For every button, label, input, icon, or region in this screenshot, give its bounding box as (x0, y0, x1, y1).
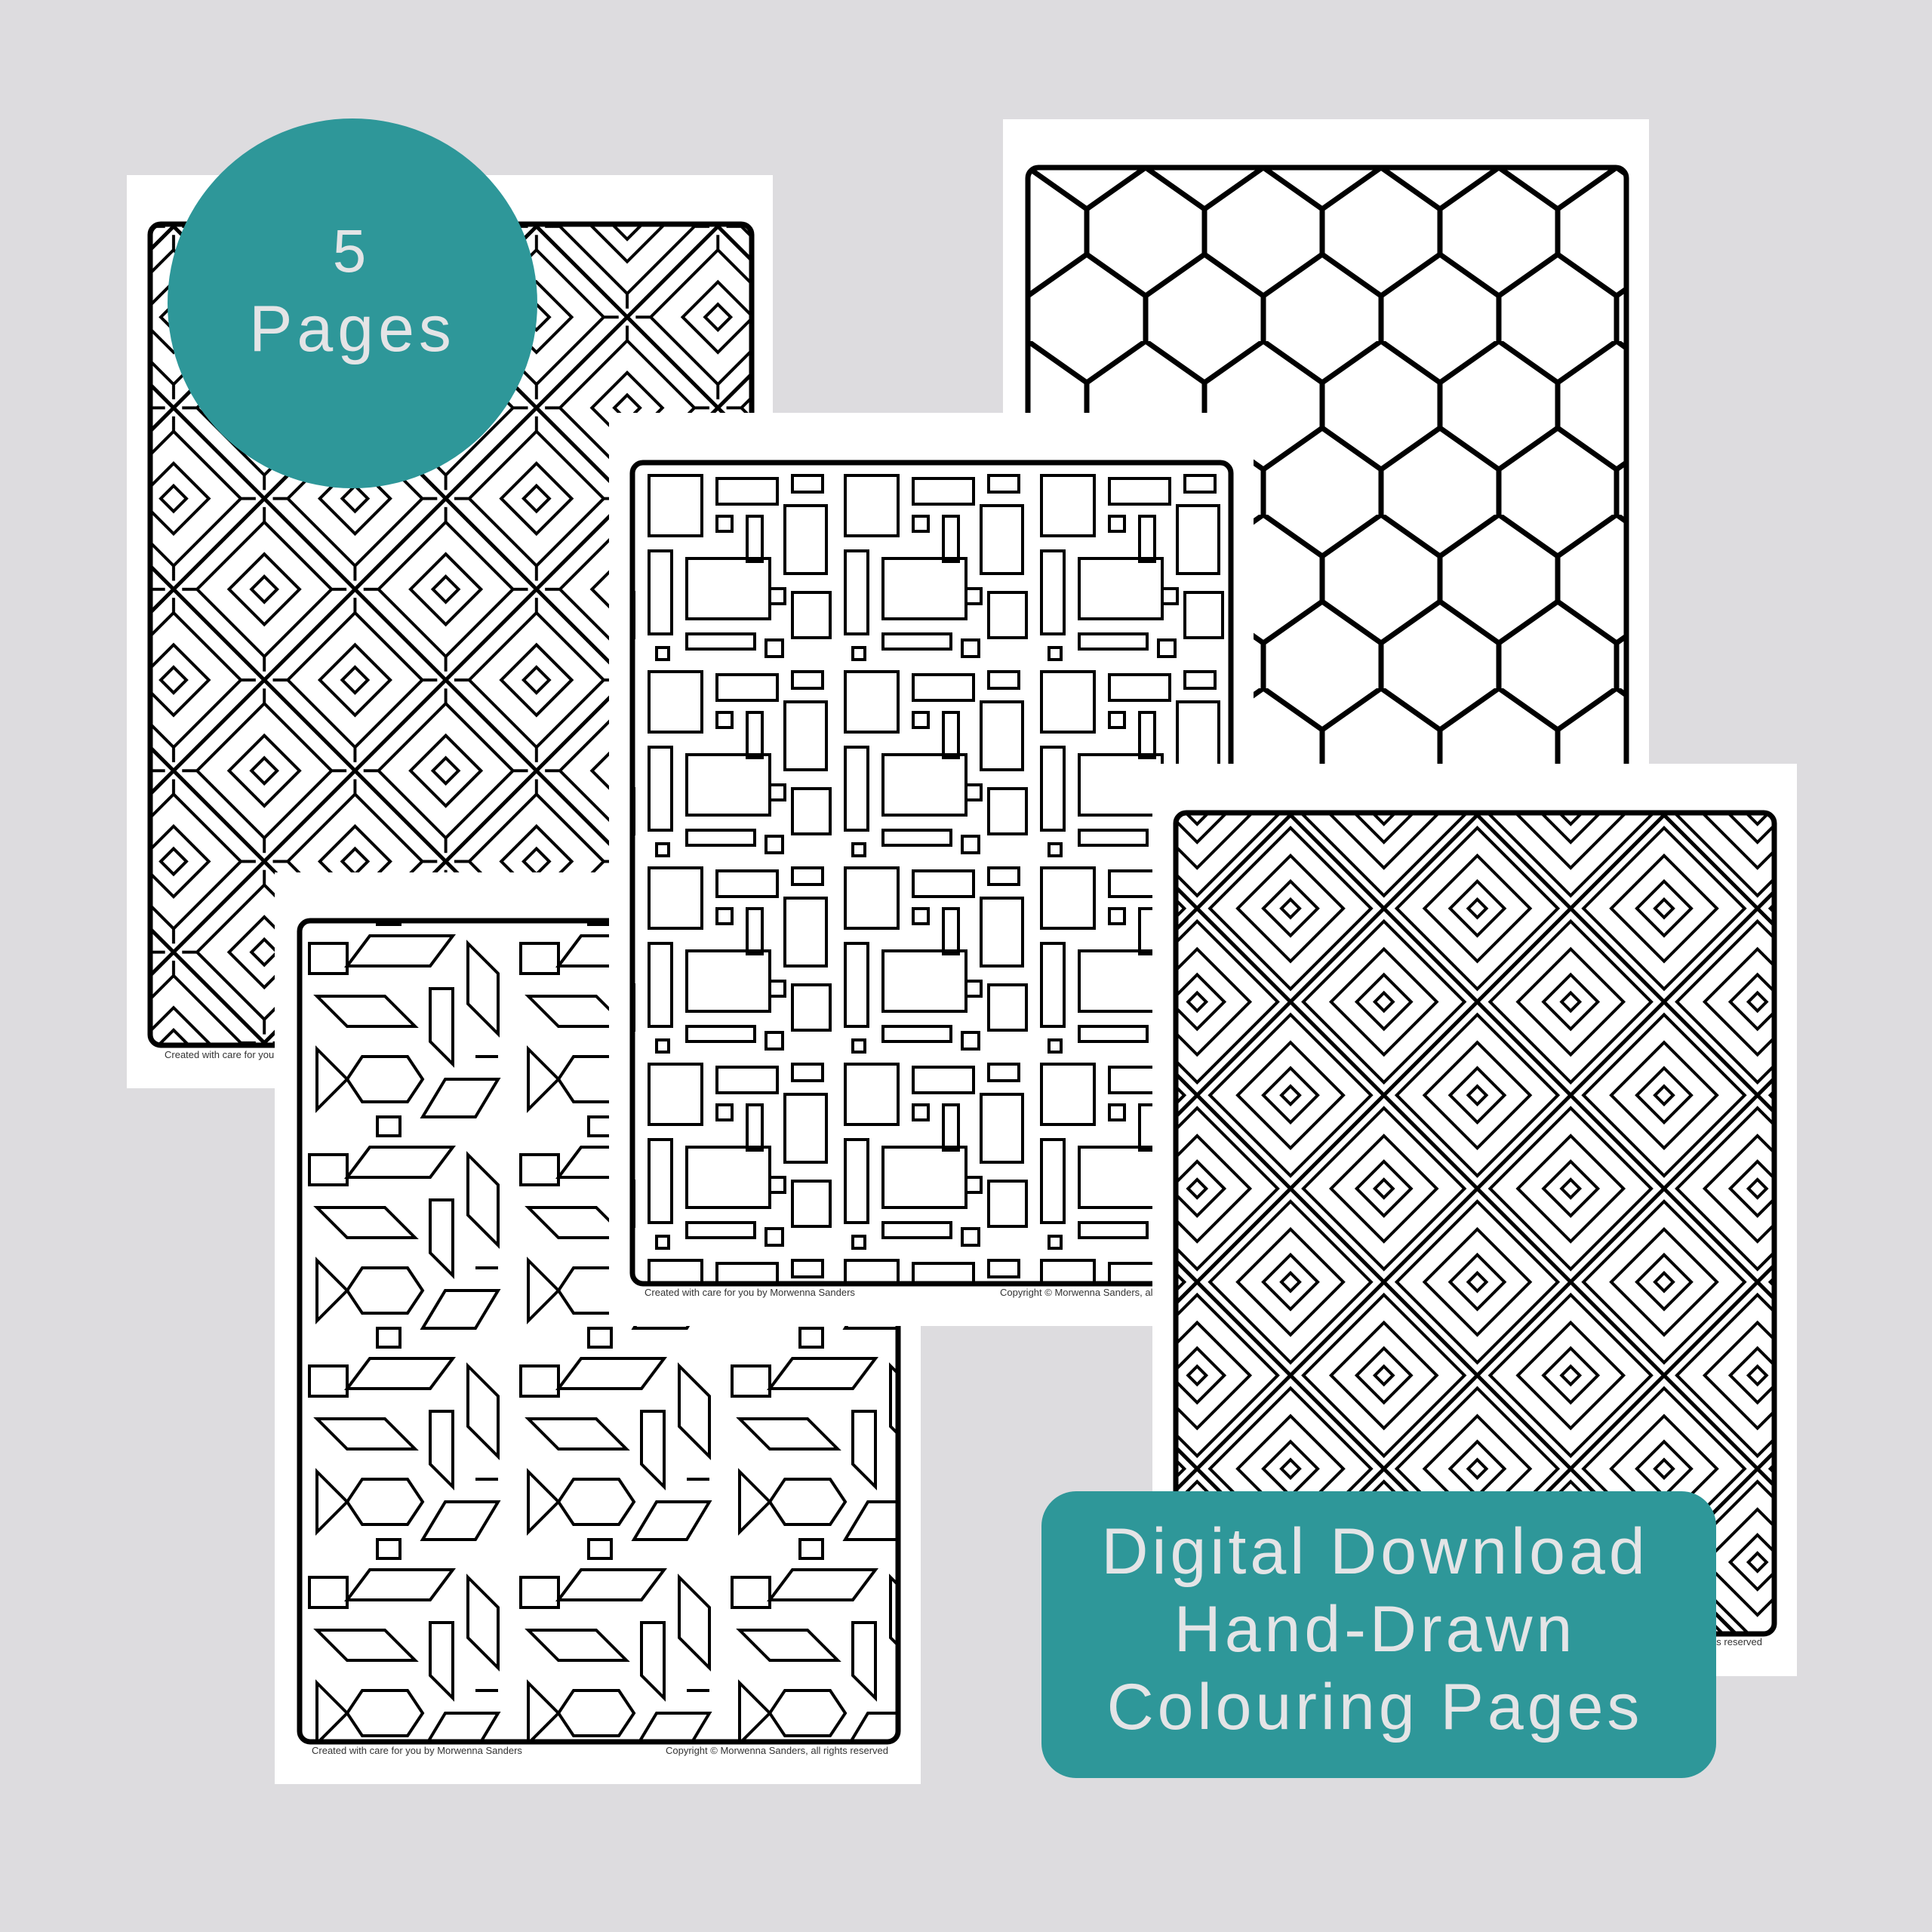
banner: digital download (1041, 1491, 1716, 1778)
page E: bottom-right concentric diamonds (1152, 764, 1797, 1676)
page D: bottom-left geometric shapes: Created with care for you by Morwenna Sanders (312, 1745, 522, 1756)
badge: 5 pages circle: 5 (333, 217, 366, 285)
page E: bottom-right concentric diamonds: Copyright © Morwenna Sanders, all rights reserved (1540, 1636, 1762, 1647)
banner: digital download: Hand-Drawn (1174, 1593, 1576, 1666)
banner: digital download: Digital Download (1101, 1515, 1649, 1588)
badge: 5 pages circle: Pages (249, 293, 456, 365)
badge: 5 pages circle (168, 118, 537, 488)
banner: digital download: Colouring Pages (1107, 1671, 1643, 1743)
page C: middle rectangles pattern: Copyright © Morwenna Sanders, all rights reserved (1000, 1287, 1223, 1298)
page C: middle rectangles pattern (609, 413, 1254, 1326)
page A: top-left diamond pattern: Created with care for you by Morwenna Sanders (165, 1049, 375, 1060)
page D: bottom-left geometric shapes: Copyright © Morwenna Sanders, all rights reserved (666, 1745, 888, 1756)
page B: top-right hexagon lattice (1003, 119, 1649, 1032)
page C: middle rectangles pattern: Created with care for you by Morwenna Sanders (645, 1287, 855, 1298)
page A: top-left diamond pattern (127, 175, 773, 1088)
page D: bottom-left geometric shapes (275, 872, 921, 1784)
